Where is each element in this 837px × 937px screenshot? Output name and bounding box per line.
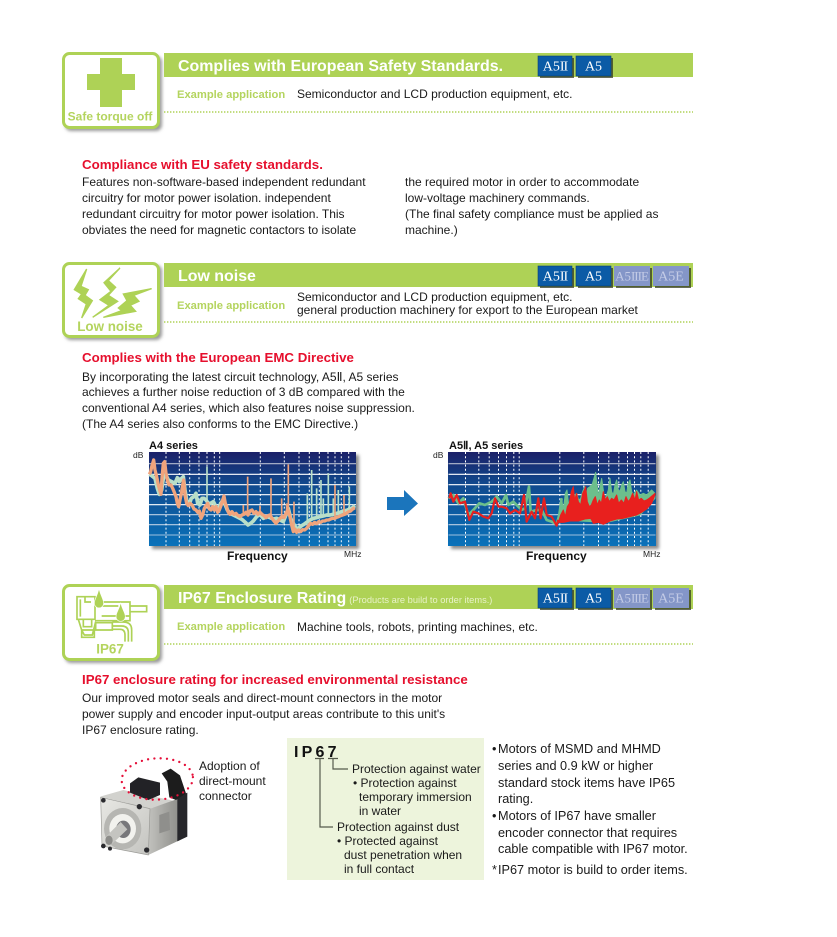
panel: IP67 explanation: Protection against dust (337, 820, 460, 834)
text block: right column: low-voltage machinery commands. (405, 191, 590, 205)
badge: A5IIIE (614, 266, 652, 288)
badge: A5IIIE: A5IIIE (615, 268, 649, 284)
badge: A5II: A5II (543, 592, 569, 606)
badge: A5 (576, 56, 613, 78)
icon: low noise (64, 264, 162, 340)
badge: A5IIIE (614, 588, 652, 610)
chart: A4 series noise: MHz (344, 549, 361, 559)
text block: EMC description: By incorporating the latest circuit technology, A5Ⅱ, A5 series (82, 370, 399, 384)
text block: IP67 description (82, 691, 445, 737)
badge: A5II: A5II (543, 270, 569, 284)
subheading: Complies with the European EMC Directive (82, 350, 354, 365)
icon: safe torque off: Safe torque off (68, 110, 153, 124)
motor photo (100, 756, 194, 855)
text block: IP67 notes: cable compatible with IP67 motor. (498, 842, 688, 856)
text block: IP67 notes (492, 742, 688, 877)
panel: IP67 explanation: • Protected against (337, 834, 439, 848)
subheading: Compliance with EU safety standards. (82, 157, 323, 172)
arrow (387, 490, 418, 516)
text block: left column: Features non-software-based independent redundant (82, 175, 366, 189)
chart: A4 series noise: dB (133, 450, 144, 460)
heading: Complies with European Safety Standards. (178, 58, 503, 75)
icon: low noise: Low noise (77, 319, 143, 334)
example application label: Example application (177, 89, 285, 101)
chart: A4 series noise (133, 440, 361, 563)
text block: IP67 notes: encoder connector that requires (498, 826, 677, 840)
badge: A5IIIE: A5IIIE (615, 590, 649, 606)
header bar (164, 585, 693, 609)
panel: low noise (64, 263, 693, 563)
text block: EMC description: achieves a further noise reduction of 3 dB compared with the (82, 385, 405, 399)
badge: A5E (653, 588, 691, 610)
panel: safe torque off (64, 53, 693, 237)
text block: left column: circuitry for motor power isolation. independent (82, 191, 331, 205)
chart: A5II, A5 series noise (433, 440, 660, 563)
chart: A5II, A5 series noise: Frequency (526, 549, 587, 563)
panel: IP67 enclosure rating (64, 585, 693, 880)
badge: A5E (653, 266, 691, 288)
header bar (164, 53, 693, 77)
badge: A5 (576, 266, 613, 288)
panel: IP67 explanation: dust penetration when (344, 848, 462, 862)
text block: EMC description (82, 370, 415, 431)
callout: direct-mount connector: connector (199, 789, 252, 803)
text block: left column: obviates the need for magnetic contactors to isolate (82, 223, 356, 237)
badge: A5II (538, 266, 574, 288)
text block: IP67 notes: rating. (498, 792, 533, 806)
icon: safe torque off (64, 54, 162, 131)
panel: IP67 explanation: in water (359, 804, 401, 818)
text block: EMC description: (The A4 series also conforms to the EMC Directive.) (82, 417, 358, 431)
text block: right column: (The final safety compliance must be applied as (405, 207, 658, 221)
example application text (297, 290, 639, 317)
badge: A5 (576, 588, 613, 610)
badge: A5E: A5E (658, 270, 684, 284)
text block: IP67 notes: • (492, 742, 496, 756)
example application text: Machine tools, robots, printing machines, etc. (297, 620, 538, 634)
chart: A4 series noise: Frequency (227, 549, 288, 563)
text block: right column (405, 175, 658, 237)
badge: A5II (538, 56, 574, 78)
text block: IP67 notes: series and 0.9 kW or higher (498, 759, 654, 773)
heading: IP67 Enclosure Rating (Products are build to order items.) (178, 590, 492, 607)
icon: IP67 (64, 586, 162, 663)
text block: IP67 notes: * (492, 863, 497, 877)
badge: A5: A5 (585, 60, 602, 74)
text block: IP67 notes: Motors of MSMD and MHMD (498, 742, 661, 756)
chart: A5II, A5 series noise: MHz (643, 549, 660, 559)
text block: IP67 description: Our improved motor seals and direct-mount connectors in the motor (82, 691, 442, 705)
panel: IP67 explanation: in full contact (344, 862, 415, 876)
badge: A5II: A5II (543, 60, 569, 74)
text block: left column: redundant circuitry for motor power isolation. This (82, 207, 345, 221)
badge: A5: A5 (585, 270, 602, 284)
text block: left column (82, 175, 366, 237)
text block: EMC description: conventional A4 series, which also features noise suppression. (82, 401, 415, 415)
panel: IP67 explanation (287, 738, 484, 880)
badge: A5E: A5E (658, 592, 684, 606)
callout: direct-mount connector: direct-mount (199, 774, 266, 788)
callout: direct-mount connector (199, 759, 266, 803)
badge: A5II (538, 588, 574, 610)
panel: IP67 explanation: temporary immersion (359, 790, 472, 804)
icon: IP67: IP67 (96, 642, 124, 656)
text block: IP67 notes: • (492, 809, 496, 823)
header bar (164, 263, 693, 287)
text block: IP67 description: power supply and encoder input-output areas contribute to this unit's (82, 707, 445, 721)
badge: A5: A5 (585, 592, 602, 606)
text block: right column: machine.) (405, 223, 458, 237)
text block: IP67 notes: Motors of IP67 have smaller (498, 809, 657, 823)
text block: IP67 description: IP67 enclosure rating. (82, 723, 199, 737)
text block: right column: the required motor in order to accommodate (405, 175, 639, 189)
chart: A4 series noise: A4 series (149, 440, 198, 452)
panel: IP67 explanation: IP67 (294, 744, 340, 761)
text block: IP67 notes: standard stock items have IP65 (498, 776, 675, 790)
chart: A5II, A5 series noise: A5Ⅱ, A5 series (449, 440, 523, 452)
example application label: Example application (177, 621, 285, 633)
text block: IP67 notes: IP67 motor is build to order items. (498, 863, 688, 877)
subheading: IP67 enclosure rating for increased environmental resistance (82, 672, 468, 687)
chart: A5II, A5 series noise: dB (433, 450, 444, 460)
example application text: Semiconductor and LCD production equipment, etc. (297, 290, 572, 304)
example application text: general production machinery for export to the European market (297, 303, 639, 317)
heading: Low noise (178, 268, 256, 285)
example application text: Semiconductor and LCD production equipment, etc. (297, 87, 572, 101)
panel: IP67 explanation: Protection against water (352, 762, 481, 776)
panel: IP67 explanation: • Protection against (353, 776, 457, 790)
example application label: Example application (177, 300, 285, 312)
callout: direct-mount connector: Adoption of (199, 759, 260, 773)
